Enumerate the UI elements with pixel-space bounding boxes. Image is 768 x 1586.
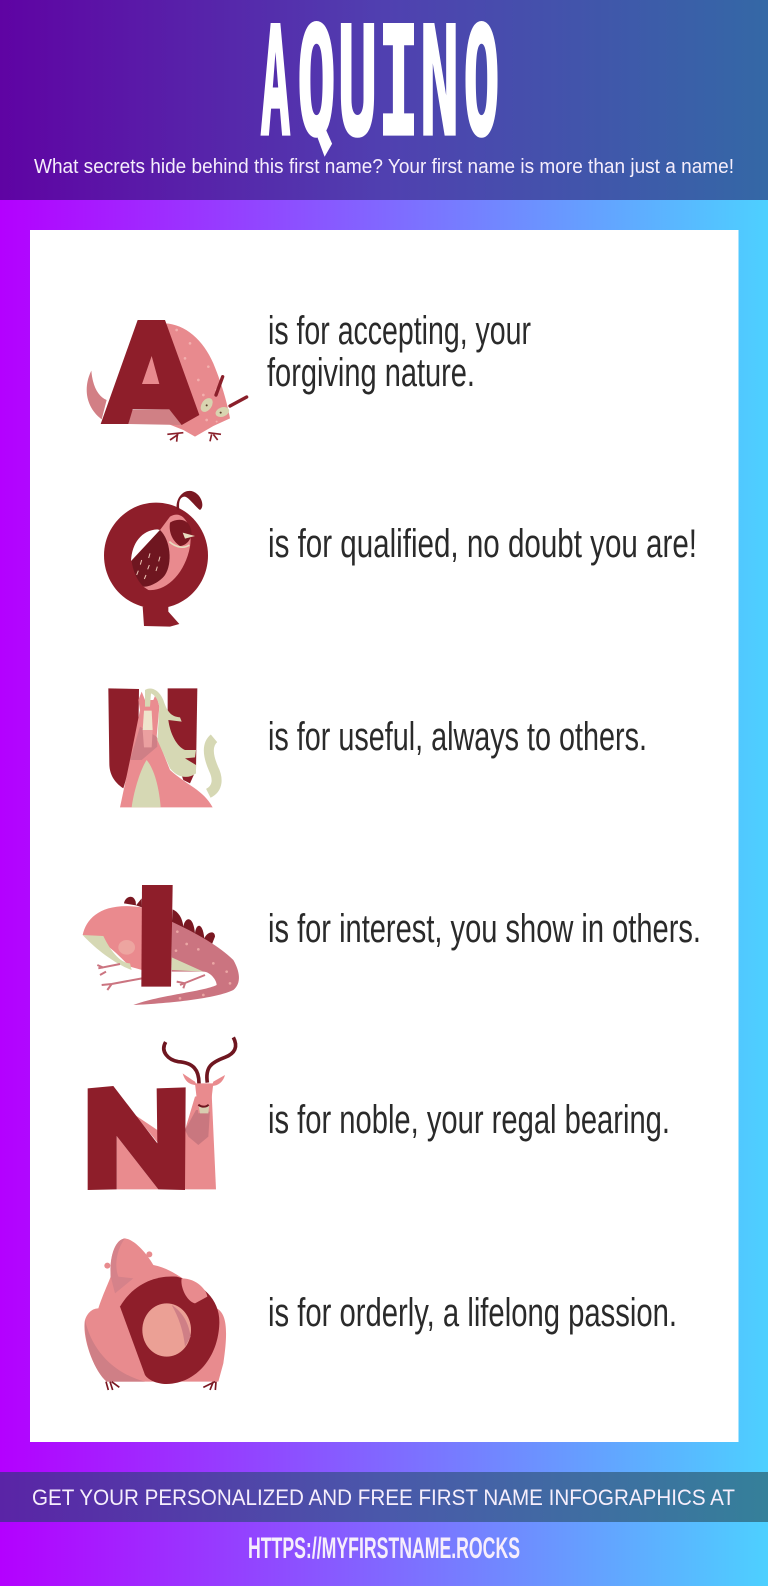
- footer call to action: GET YOUR PERSONALIZED AND FREE FIRST NAME INFOGRAPHICS AT: [32, 1485, 735, 1510]
- title: O: [463, 0, 500, 169]
- white content panel: [30, 230, 738, 1442]
- title: N: [420, 0, 459, 170]
- tagline: What secrets hide behind this first name? Your first name is more than just a name!: [34, 156, 734, 178]
- title: [260, 0, 500, 170]
- icon: letter A armadillo: [87, 320, 247, 442]
- title: I: [378, 0, 419, 170]
- icon: letter N gazelle: [88, 1037, 236, 1190]
- icon: letter U horse: [108, 688, 217, 807]
- icon: letter I lizard: [83, 885, 239, 1005]
- icon: letter Q quail: [104, 491, 208, 627]
- title: Q: [297, 0, 336, 170]
- title: U: [338, 0, 377, 170]
- header band: [0, 0, 768, 200]
- text: A second line: forgiving nature.: [267, 351, 475, 395]
- footer url: HTTPS://MYFIRSTNAME.ROCKS: [248, 1532, 520, 1565]
- title: A: [260, 0, 291, 170]
- footer band: [0, 1472, 768, 1522]
- icon: letter O ape: [84, 1238, 226, 1390]
- text: A: is for accepting, your: [268, 309, 531, 353]
